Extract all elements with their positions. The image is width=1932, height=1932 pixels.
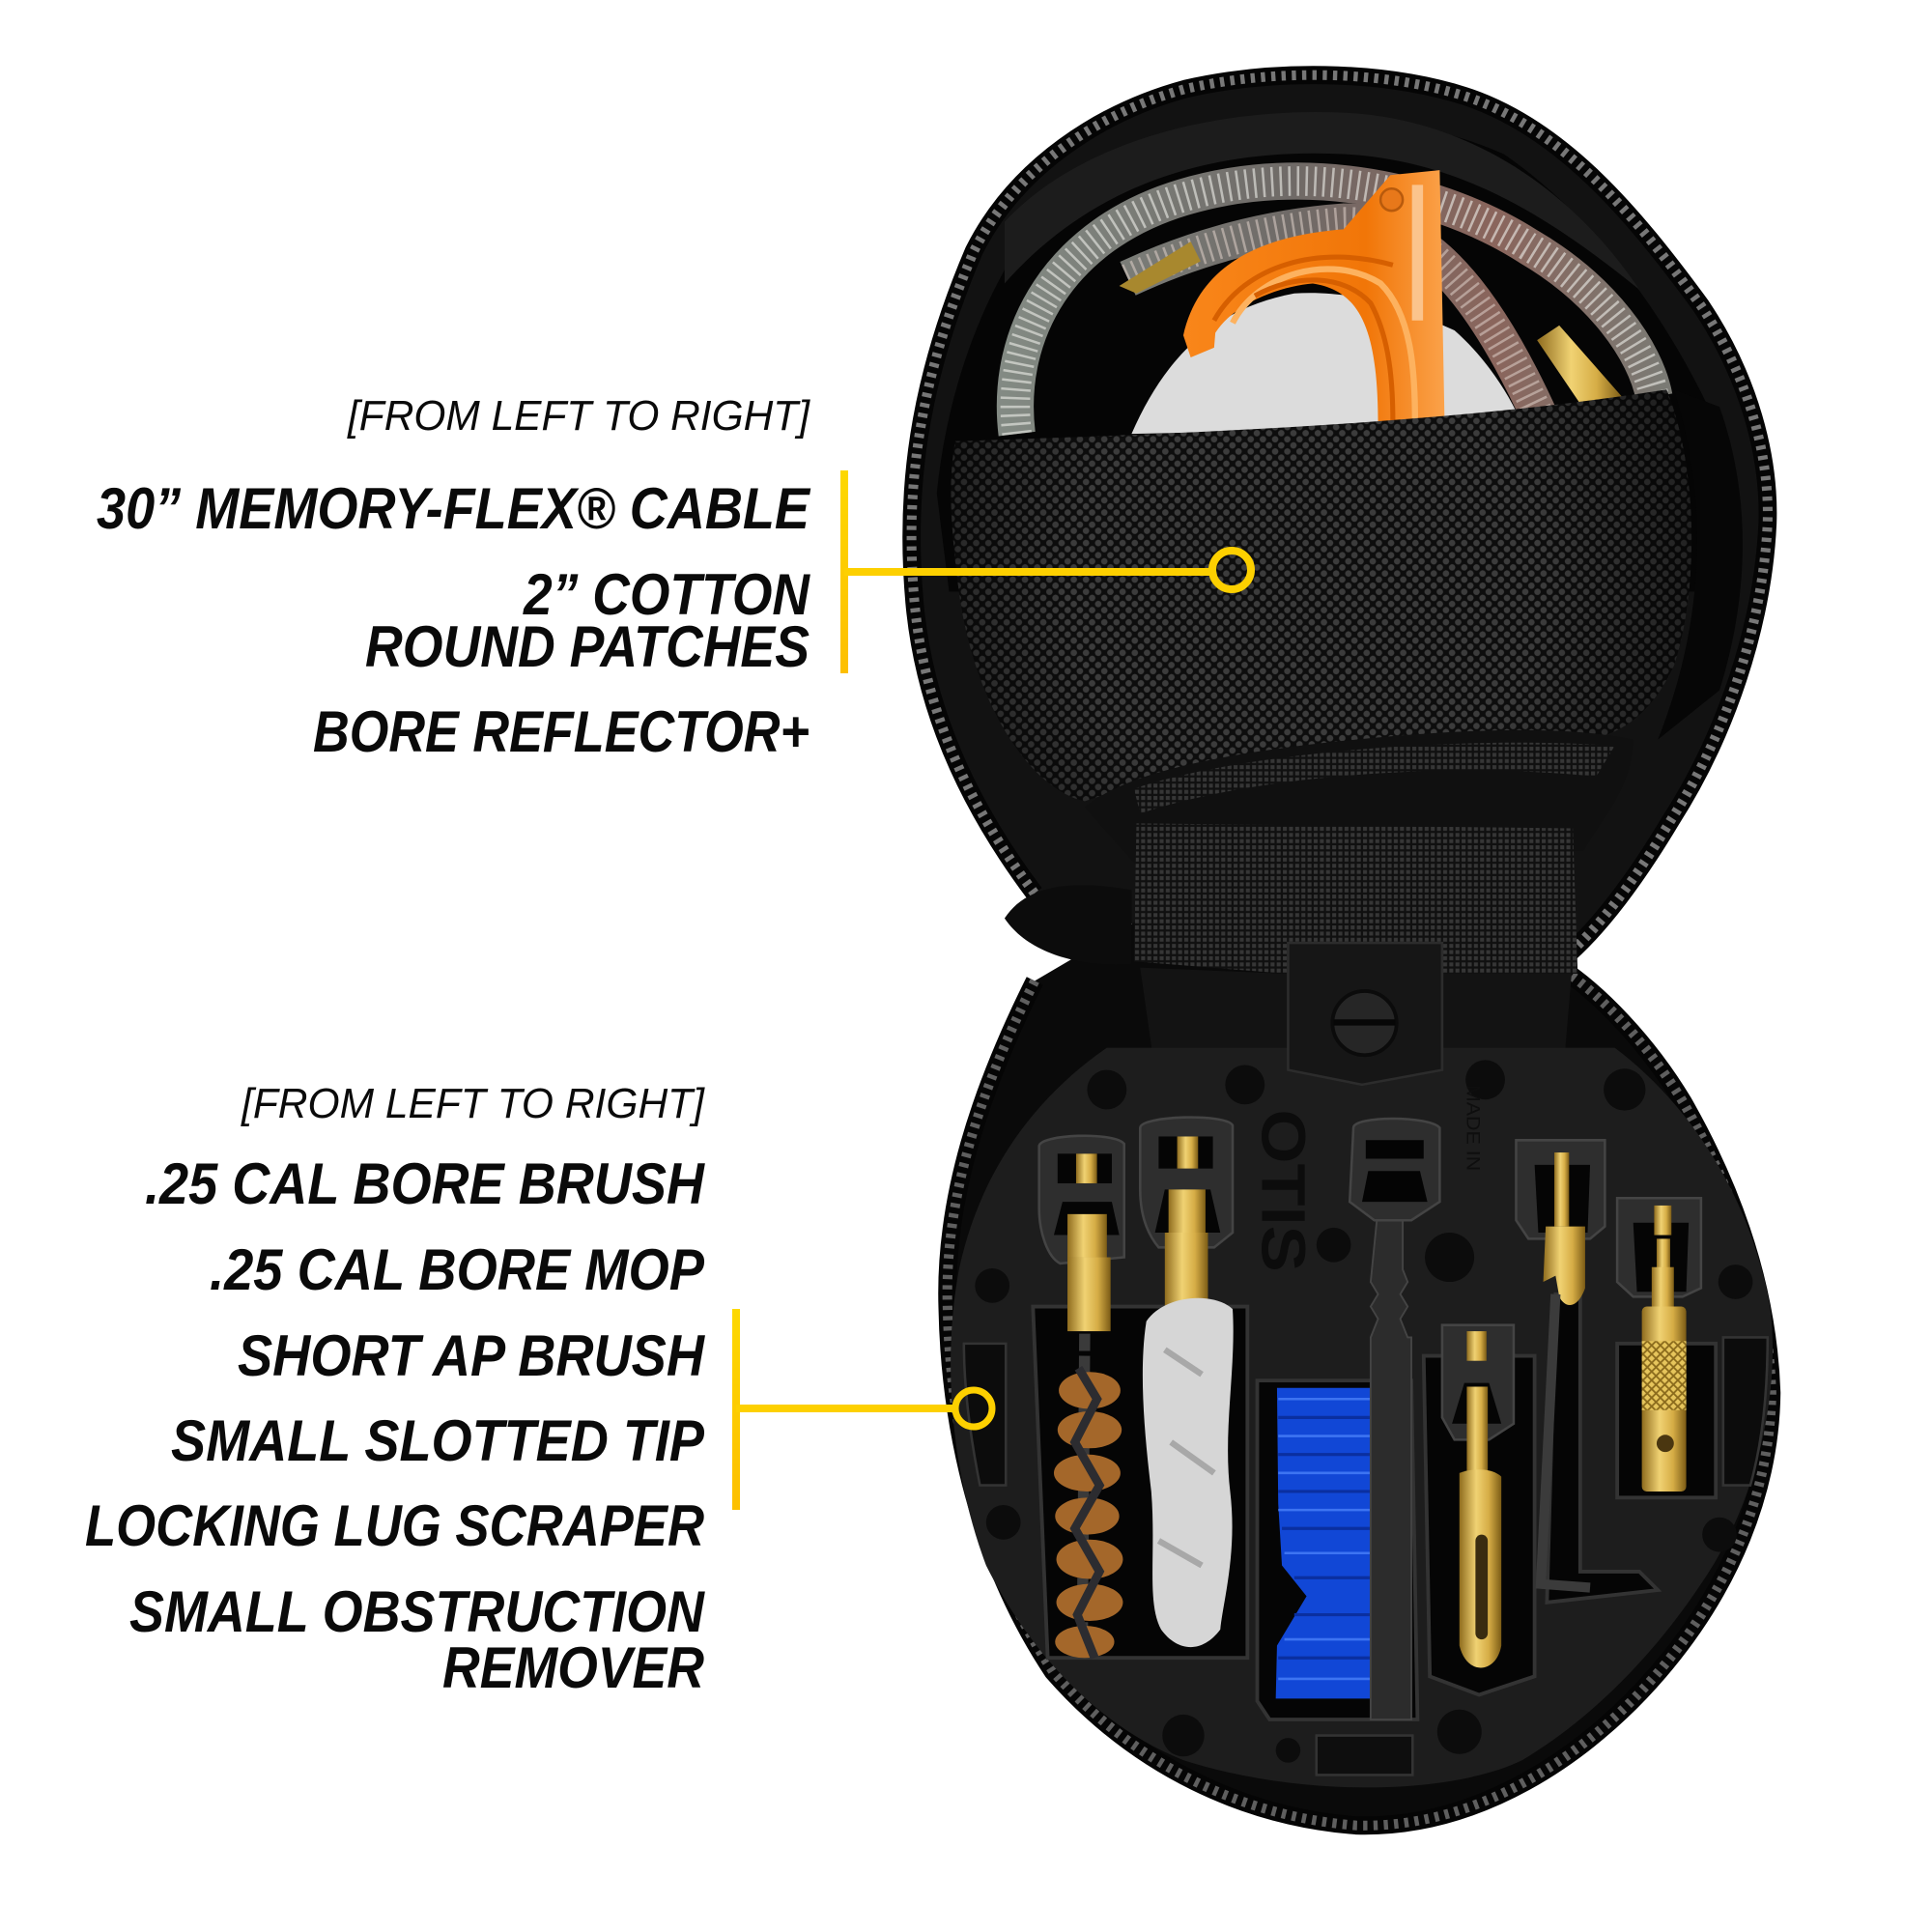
- plate: made in USA: MADE IN: [1462, 1085, 1482, 1171]
- plate: tool wells: [1033, 1294, 1716, 1719]
- tool: bore brush: [1039, 1136, 1124, 1658]
- pocket shadow edges: [1658, 389, 1743, 740]
- zipper: lower case base: [948, 969, 1772, 1826]
- hinge strap: [1134, 823, 1577, 974]
- item: locking lug scraper: LOCKING LUG SCRAPER: [85, 1493, 704, 1558]
- lining fabric band: [1005, 112, 1639, 290]
- lower yellow callout: [732, 1309, 992, 1510]
- zip puller: [1005, 885, 1131, 964]
- plate: mounting holes: [964, 1060, 1768, 1775]
- item: cotton patches line two: ROUND PATCHES: [365, 614, 810, 679]
- heading: lower group note: [FROM LEFT TO RIGHT]: [241, 1080, 706, 1127]
- patches: white cotton rounds: [1131, 293, 1522, 434]
- item: bore brush: .25 CAL BORE BRUSH: [145, 1151, 705, 1216]
- tool: small obstruction remover: [1617, 1198, 1701, 1492]
- item: small slotted tip: SMALL SLOTTED TIP: [171, 1408, 705, 1473]
- upper group item list: [97, 476, 811, 764]
- pocket: woven fabric front: [952, 389, 1691, 801]
- heading: upper group note: [FROM LEFT TO RIGHT]: [347, 392, 811, 440]
- item: bore mop: .25 CAL BORE MOP: [210, 1237, 705, 1302]
- lower case shell: [948, 921, 1772, 1826]
- upper case shell: [912, 75, 1768, 979]
- elastic band ribs: [1134, 743, 1615, 813]
- tool plate: [951, 1048, 1773, 1787]
- item: bore reflector: BORE REFLECTOR+: [313, 699, 810, 764]
- cable tip: brass right: [1537, 326, 1622, 410]
- cable: coiled steel cable: [1015, 181, 1654, 434]
- cable tip: brass left: [1120, 242, 1201, 294]
- item: short AP brush: SHORT AP BRUSH: [238, 1323, 706, 1388]
- clip and screw: [1288, 943, 1442, 1085]
- lower group item list: [85, 1151, 706, 1700]
- item: cotton patches line one: 2” COTTON: [523, 562, 810, 627]
- zipper: upper case teeth: [912, 75, 1768, 960]
- item: obstruction remover line one: SMALL OBSTRUCTION: [129, 1579, 705, 1644]
- tool: bore mop: [1140, 1118, 1234, 1647]
- elastic gathered band: [1085, 730, 1634, 863]
- product: open zip case with tools: [912, 75, 1773, 1826]
- plate: logo OTIS: OTIS: [1249, 1109, 1319, 1272]
- pocket edge fade: [952, 389, 1691, 801]
- strap lower fabric: [1140, 968, 1572, 1054]
- item: memory-flex cable: 30” MEMORY-FLEX® CABLE: [97, 476, 811, 541]
- tool: locking lug scraper: [1516, 1140, 1605, 1587]
- tool: small slotted tip: [1442, 1325, 1514, 1667]
- upper yellow callout: [840, 470, 1251, 673]
- tool: short AP brush: [1276, 1119, 1439, 1719]
- zipper: lower case teeth: [948, 969, 1772, 1826]
- bore reflector: orange: [1183, 170, 1444, 426]
- lining and cavity: [937, 116, 1719, 591]
- zipper: upper case base: [912, 75, 1768, 960]
- item: obstruction remover line two: REMOVER: [442, 1635, 704, 1700]
